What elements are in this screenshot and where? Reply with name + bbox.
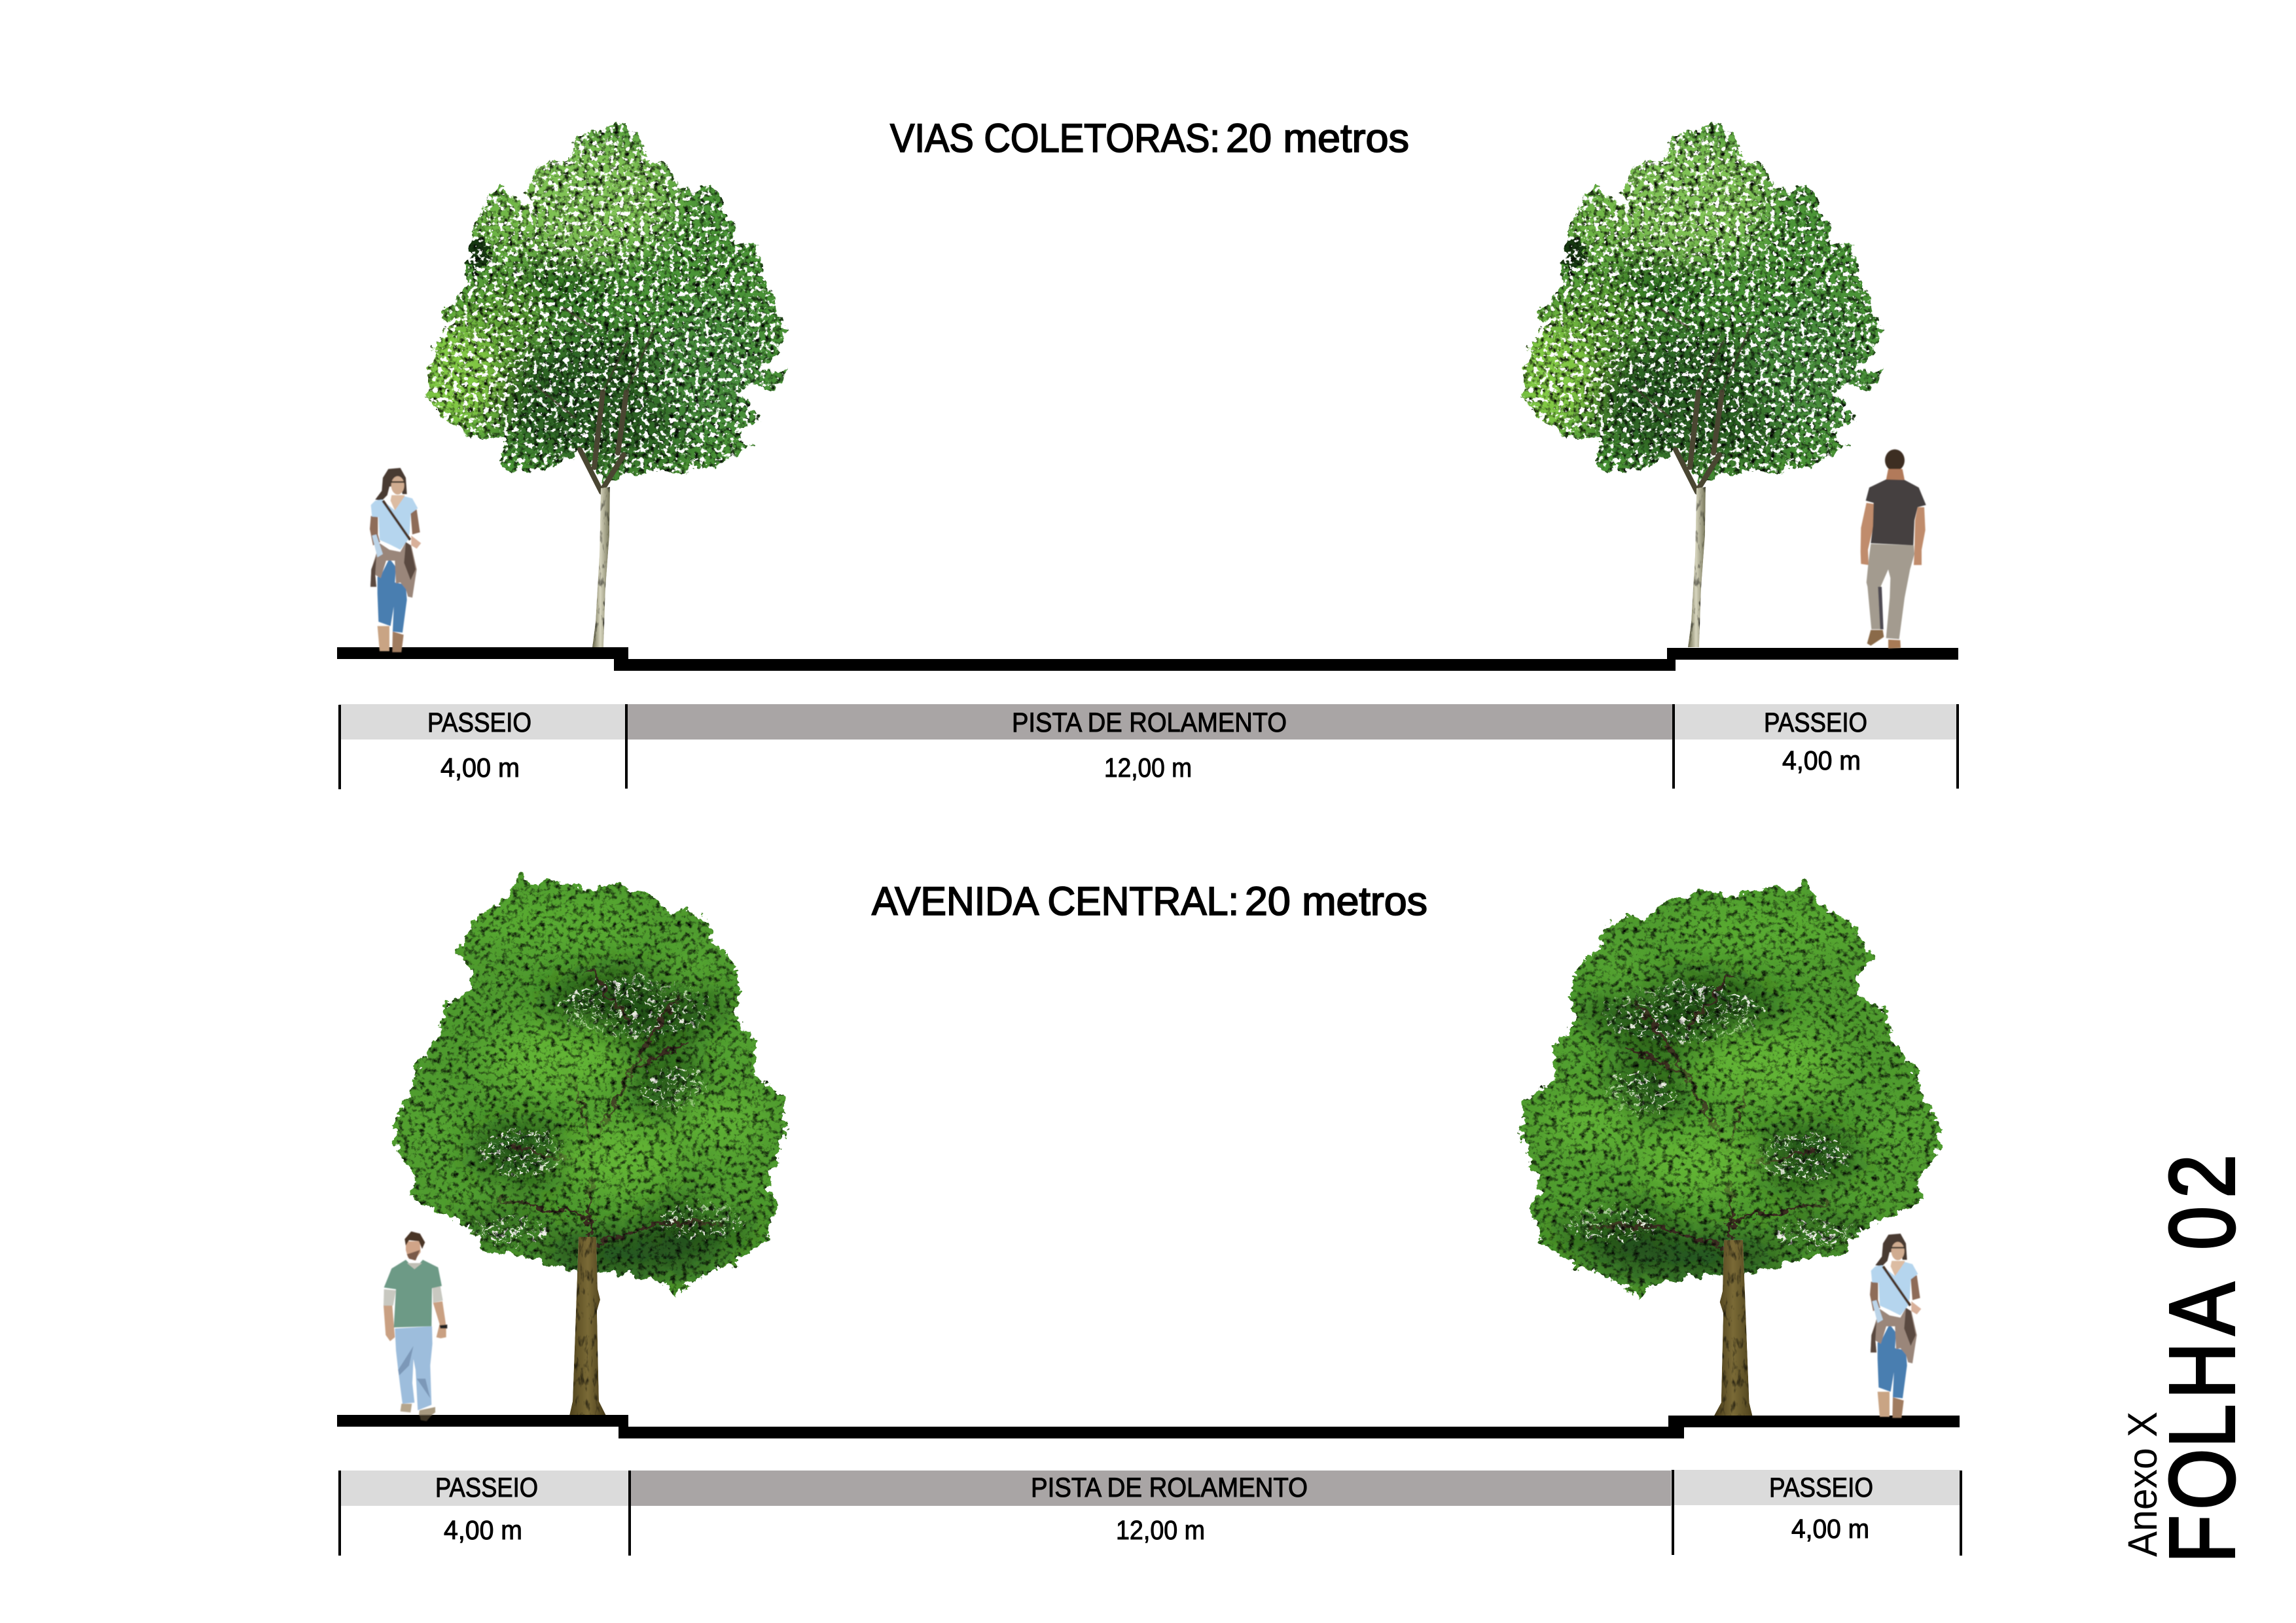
person: man on left sidewalk (384, 1232, 447, 1421)
person: man walking on right sidewalk (1861, 450, 1926, 649)
label: passeio right: PASSEIO (1764, 707, 1867, 738)
tree: right sidewalk, vias coletoras (1488, 98, 1920, 647)
dimension bar: vias coletoras (338, 704, 1959, 789)
title: avenida central: 20 metros (1245, 879, 1427, 923)
title: vias coletoras: 20 metros (1226, 116, 1409, 160)
label: passeio left: PASSEIO (427, 707, 531, 738)
measure: right sidewalk: 4,00 m (1782, 745, 1861, 776)
infographic: road cross sections sheet (337, 122, 2236, 1558)
label: pista de rolamento: PISTA DE ROLAMENTO (1012, 707, 1287, 738)
label: pista de rolamento: PISTA DE ROLAMENTO (1031, 1472, 1308, 1503)
tree: right sidewalk, avenida central (1486, 858, 1970, 1417)
title: vias coletoras: VIAS COLETORAS: (890, 116, 1220, 160)
measure: left sidewalk: 4,00 m (444, 1515, 522, 1545)
person: woman on right sidewalk (1870, 1234, 1921, 1418)
dimension bar: avenida central (338, 1470, 1962, 1556)
label: passeio right: PASSEIO (1769, 1472, 1873, 1503)
measure: right sidewalk: 4,00 m (1791, 1514, 1869, 1544)
road section profile: avenida central (337, 1415, 1960, 1438)
tree: left sidewalk, vias coletoras (393, 98, 825, 647)
measure: roadway: 12,00 m (1116, 1515, 1205, 1545)
title: avenida central: AVENIDA CENTRAL: (872, 879, 1239, 923)
person: woman on left sidewalk (370, 468, 421, 652)
road section profile: vias coletoras (337, 647, 1958, 671)
label: passeio left: PASSEIO (435, 1472, 538, 1503)
sheet title, rotated: FOLHA 02 (2151, 1154, 2253, 1563)
measure: roadway: 12,00 m (1104, 753, 1192, 783)
annex label, rotated: Anexo X (2120, 1412, 2166, 1557)
tree: left sidewalk, avenida central (367, 851, 818, 1416)
measure: left sidewalk: 4,00 m (440, 753, 520, 783)
